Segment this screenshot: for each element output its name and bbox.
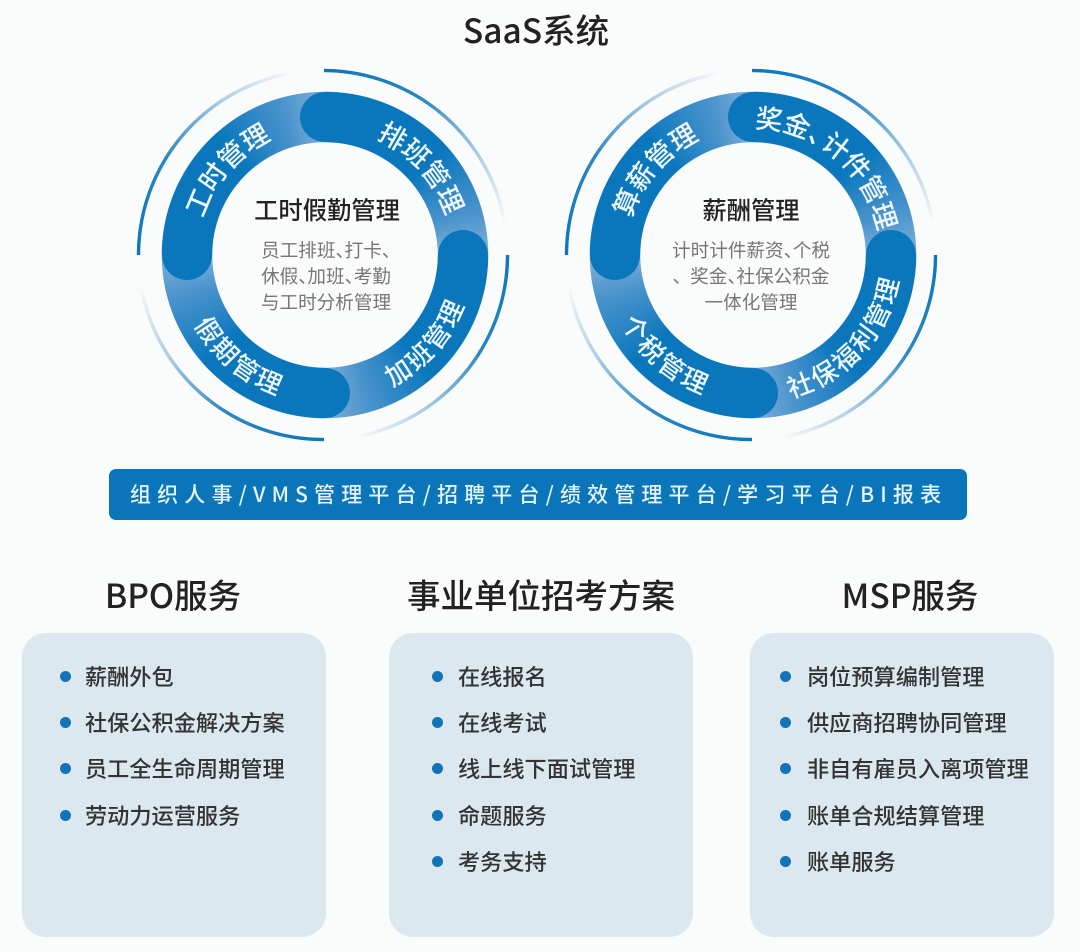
ring caps and segment labels: 奖金、计件管理 <box>756 106 899 232</box>
list item: 账单合规结算管理 <box>807 799 984 831</box>
ring caps and segment labels: 个税管理 <box>625 316 710 396</box>
center description: 休假、加班、考勤 <box>261 262 391 289</box>
heading: MSP服务: MSP服务 <box>842 569 978 618</box>
list item: 在线报名 <box>458 660 547 692</box>
ring caps and segment labels <box>162 92 488 418</box>
outer thin arcs <box>136 68 510 442</box>
ring caps and segment labels: 社保福利管理 <box>786 277 900 399</box>
heading: 事业单位招考方案: 事业单位招考方案 <box>407 569 675 618</box>
center description: 计时计件薪资、个税 <box>672 236 830 263</box>
platform bar <box>109 469 967 520</box>
list item: 线上线下面试管理 <box>458 752 636 784</box>
platform bar: 组织人事/VMS管理平台/招聘平台/绩效管理平台/学习平台/BI报表 <box>130 479 947 509</box>
list item: 非自有雇员入离项管理 <box>807 752 1029 784</box>
center heading: 工时假勤管理 <box>254 191 400 226</box>
title: SaaS系统: SaaS系统 <box>463 4 609 53</box>
ring diagram: 工时假勤管理 <box>136 68 510 442</box>
list item: 社保公积金解决方案 <box>85 706 285 738</box>
list item: 岗位预算编制管理 <box>807 660 984 692</box>
list item: 考务支持 <box>458 845 547 877</box>
ring caps and segment labels: 工时管理 <box>185 122 272 218</box>
ring caps and segment labels <box>590 92 916 418</box>
center description <box>261 236 391 315</box>
list item: 账单服务 <box>807 845 896 877</box>
center description: 、奖金、社保公积金 <box>673 262 829 289</box>
ring caps and segment labels: 排班管理 <box>377 120 466 216</box>
ring caps and segment labels: 假期管理 <box>194 316 284 396</box>
list item: 劳动力运营服务 <box>85 799 240 831</box>
list item: 薪酬外包 <box>85 660 174 692</box>
center description: 与工时分析管理 <box>261 288 391 315</box>
list item: 命题服务 <box>458 799 547 831</box>
ring caps and segment labels: 加班管理 <box>384 298 466 388</box>
list item: 在线考试 <box>458 706 547 738</box>
list item: 供应商招聘协同管理 <box>807 706 1007 738</box>
ring segments band <box>590 92 916 418</box>
ring segments band <box>162 92 488 418</box>
ring caps and segment labels: 算薪管理 <box>611 122 700 217</box>
heading: BPO服务: BPO服务 <box>105 569 241 618</box>
center description <box>672 236 830 315</box>
center description: 一体化管理 <box>704 288 797 315</box>
center heading: 薪酬管理 <box>702 191 800 226</box>
outer thin arcs <box>564 68 938 442</box>
panel: BPO服务 <box>22 633 326 937</box>
list item: 员工全生命周期管理 <box>85 752 285 784</box>
panel: 事业单位招考方案 <box>389 633 693 937</box>
ring diagram: 薪酬管理 <box>564 68 938 442</box>
center description: 员工排班、打卡、 <box>261 236 391 263</box>
panel: MSP服务 <box>750 633 1054 937</box>
